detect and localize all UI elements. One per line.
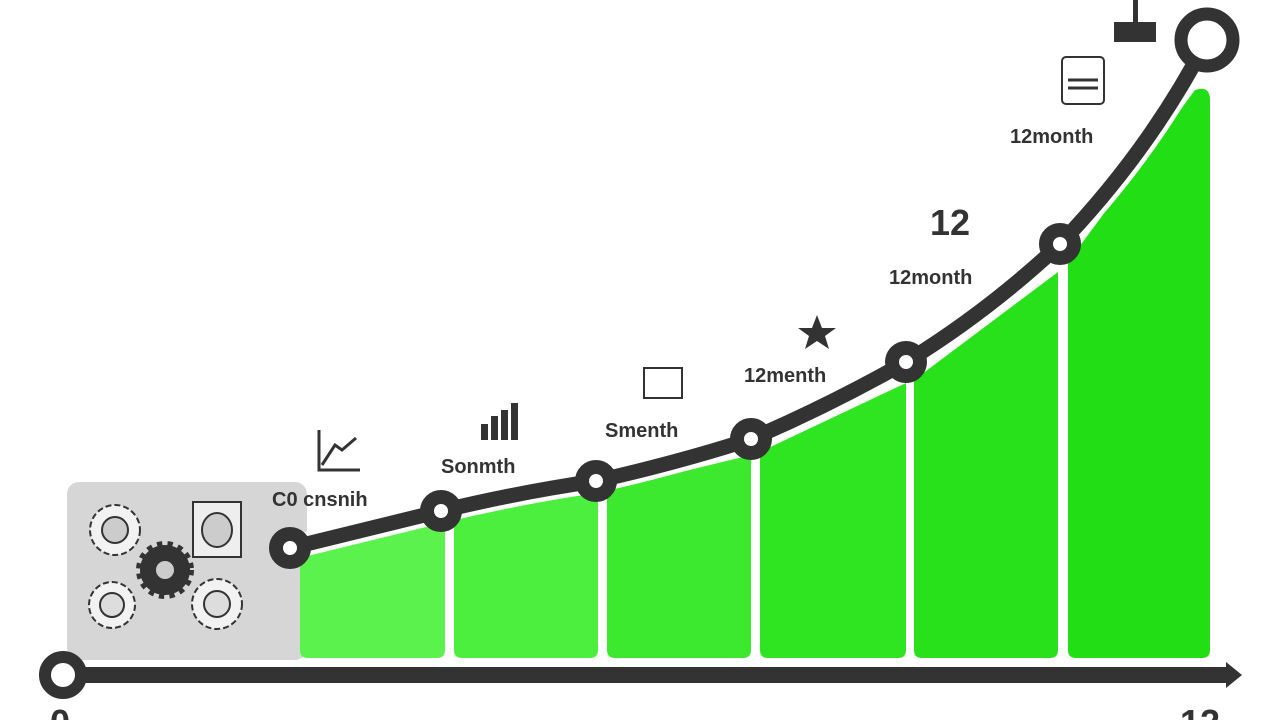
labels: 12menth — [744, 365, 826, 387]
panel: gray gears box — [67, 482, 307, 660]
labels: 12 — [930, 202, 970, 243]
labels: Smenth — [605, 420, 678, 442]
axis — [45, 657, 1242, 720]
labels: C0 cnsnih — [272, 489, 368, 511]
labels: 12month — [889, 267, 972, 289]
icon: gears — [89, 502, 242, 629]
labels: 12month — [1010, 126, 1093, 148]
labels — [272, 126, 1093, 511]
labels: Sonmth — [441, 456, 515, 478]
bars — [300, 89, 1210, 658]
icons — [319, 0, 1156, 470]
growth line — [276, 14, 1233, 562]
